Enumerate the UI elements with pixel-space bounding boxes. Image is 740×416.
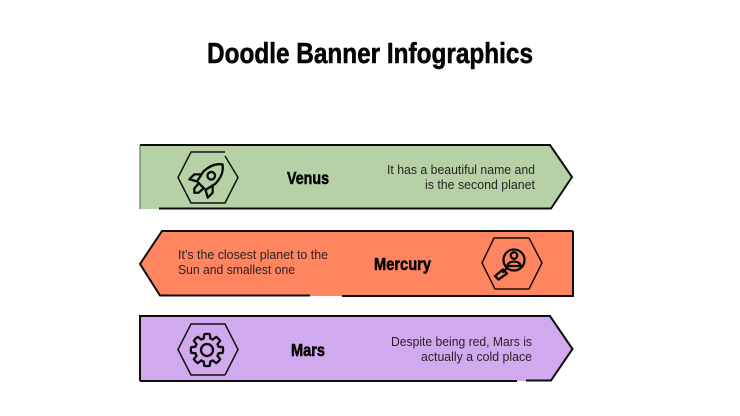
panel: Venus banner: [140, 145, 572, 209]
title: Doodle Banner Infographics: [207, 38, 533, 70]
icon: magnifier with person in hexagon: [482, 238, 542, 289]
description: Mercury: It’s the closest planet to the: [178, 248, 328, 262]
description: Venus: It has a beautiful name and: [387, 163, 535, 177]
panel: Mars banner: [140, 316, 573, 381]
label: Venus: Venus: [287, 168, 329, 188]
description: Mars: [391, 335, 532, 364]
icon: gear in hexagon: [178, 324, 238, 375]
banner shape: purple arrow: [140, 316, 573, 381]
panel: Mercury banner: [140, 231, 573, 296]
description: Mars: actually a cold place: [421, 350, 532, 364]
banner shape: orange arrow: [140, 231, 573, 296]
description: Mercury: [178, 248, 328, 277]
description: Venus: [387, 163, 536, 192]
description: Venus: is the second planet: [425, 178, 536, 192]
banner shape: green arrow: [140, 145, 572, 209]
icon: rocket in hexagon: [178, 152, 238, 203]
description: Mars: Despite being red, Mars is: [391, 335, 532, 349]
label: Mars: Mars: [291, 340, 325, 360]
label: Mercury: Mercury: [374, 254, 431, 274]
description: Mercury: Sun and smallest one: [178, 263, 295, 277]
